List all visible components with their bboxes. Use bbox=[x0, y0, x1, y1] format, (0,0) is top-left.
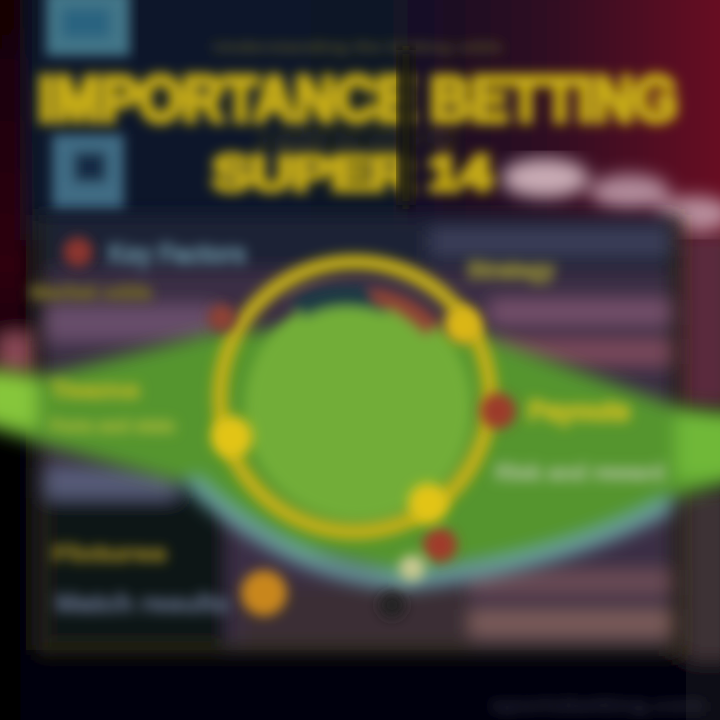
vertical divider bbox=[398, 50, 414, 205]
label: left on pitch: Teams bbox=[50, 377, 140, 404]
label: top left: Key Factors bbox=[108, 238, 246, 269]
text: right pitch: Risk and reward bbox=[495, 460, 665, 485]
text: left pitch: Form and stats bbox=[50, 416, 175, 436]
ring markers bbox=[63, 237, 516, 618]
label: bottom left heading: Fixtures bbox=[52, 541, 167, 566]
teal header blocks bbox=[46, 0, 130, 210]
pitch bbox=[0, 330, 720, 582]
stadium stands bbox=[36, 215, 682, 655]
title line two: SUPER 14 bbox=[212, 145, 492, 201]
circular diagram bbox=[220, 262, 490, 532]
label: right on pitch: Payouts bbox=[528, 395, 630, 426]
labels bbox=[30, 238, 665, 618]
ring: yellow circle bbox=[220, 262, 490, 532]
footer credit: sportsbetting.com bbox=[490, 695, 705, 717]
label: top right: Strategy bbox=[467, 257, 556, 284]
text: bottom left: Match results bbox=[55, 588, 230, 618]
label: left heading: Market odds bbox=[30, 282, 152, 304]
title tagline: a guide for every fan bbox=[258, 131, 458, 146]
subtitle: Understanding the betting odds bbox=[213, 39, 503, 56]
clouds bbox=[501, 158, 720, 232]
center circle bbox=[245, 294, 471, 520]
title bbox=[38, 39, 678, 201]
